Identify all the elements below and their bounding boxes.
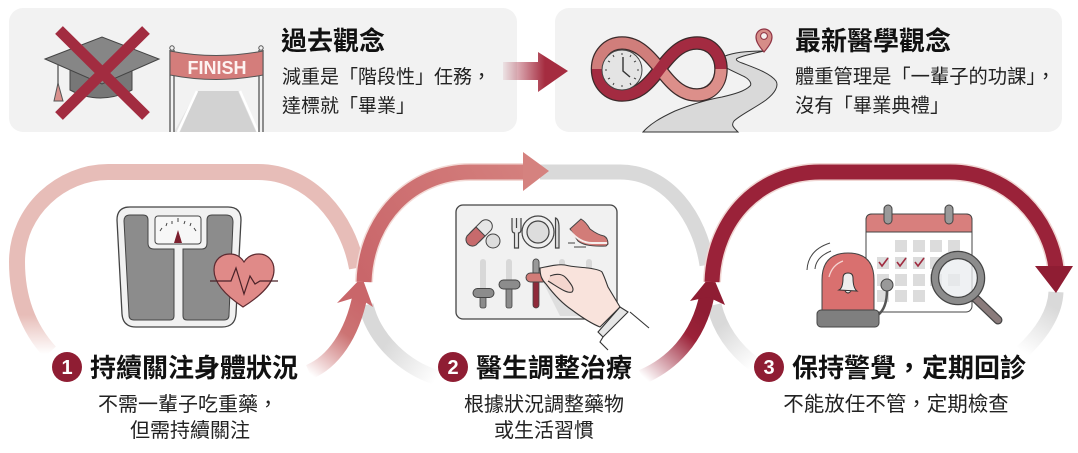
badge: number 2 [438, 352, 468, 382]
heading: step 2: 醫生調整治療 [476, 353, 632, 383]
text: past concept description [282, 66, 491, 117]
text: step 1 description: 但需持續關注 [130, 419, 250, 442]
icon: finish line banner [170, 46, 263, 132]
icon: running shoe [568, 219, 608, 247]
text: past concept description: 達標就「畢業」 [282, 95, 415, 117]
icon: winding road with pin [643, 29, 777, 132]
icon: pills [466, 217, 500, 248]
icon: alarm siren [807, 243, 893, 327]
label: step 3 [754, 352, 1026, 416]
icon: infinity loop with clock [598, 43, 721, 95]
panel: latest concept [555, 8, 1062, 132]
icon: crossed graduation cap [45, 30, 159, 116]
arrow: step 2 red arc [364, 152, 549, 282]
icon: treatment control board with hand [456, 205, 649, 350]
panel: past concept [9, 8, 517, 132]
heading: past concept: 過去觀念 [281, 26, 385, 56]
arrow: step 2 to step 3 [642, 274, 725, 377]
label: step 1 [52, 352, 298, 442]
icon: calendar [866, 205, 972, 312]
badge: number 3: 3 [763, 357, 775, 379]
loop: step 2 grey lower arc [366, 305, 438, 378]
arrow: past to latest [503, 52, 568, 92]
loop: step 3 grey return arc [1022, 292, 1056, 352]
text: latest concept description: 沒有「畢業典禮」 [795, 95, 949, 117]
badge: number 2: 2 [447, 357, 459, 379]
text: step 2 description [464, 393, 624, 442]
icon: bathroom scale with heart [117, 207, 278, 327]
icon: hand in sleeve [540, 265, 649, 350]
heading: step 3: 保持警覺，定期回診 [792, 353, 1026, 383]
chart: sliders [473, 259, 592, 308]
text: step 1 description [98, 393, 278, 442]
loop: step 2 grey upper arc [540, 172, 707, 265]
icon: magnifying glass [935, 255, 998, 320]
loop: step 3 grey lower arc [714, 305, 755, 365]
text: past concept description: 減重是「階段性」任務， [282, 66, 491, 88]
heading: latest concept: 最新醫學觀念 [795, 26, 951, 56]
loop: step 1 pink arc [17, 172, 357, 352]
badge: number 1 [52, 352, 82, 382]
text: latest concept description: 體重管理是「一輩子的功課」， [795, 66, 1055, 88]
heading: step 1: 持續關注身體狀況 [90, 353, 298, 383]
arrow: step 1 to step 2 [309, 277, 373, 372]
icon: fork plate knife [512, 216, 559, 248]
icon: alarm, calendar and magnifier [807, 205, 998, 327]
text: step 3 description: 不能放任不管，定期檢查 [783, 393, 1009, 416]
icon: finish line banner: FINISH [187, 58, 247, 78]
label: step 2 [438, 352, 632, 442]
text: latest concept description [795, 66, 1055, 117]
text: step 2 description: 或生活習慣 [494, 419, 594, 442]
badge: number 1: 1 [61, 357, 73, 379]
icon: heart with pulse [210, 254, 278, 307]
text: step 2 description: 根據狀況調整藥物 [464, 393, 624, 416]
text: step 1 description: 不需一輩子吃重藥， [98, 393, 278, 416]
arrow: step 3 dark red arc [712, 172, 1073, 293]
badge: number 3 [754, 352, 784, 382]
